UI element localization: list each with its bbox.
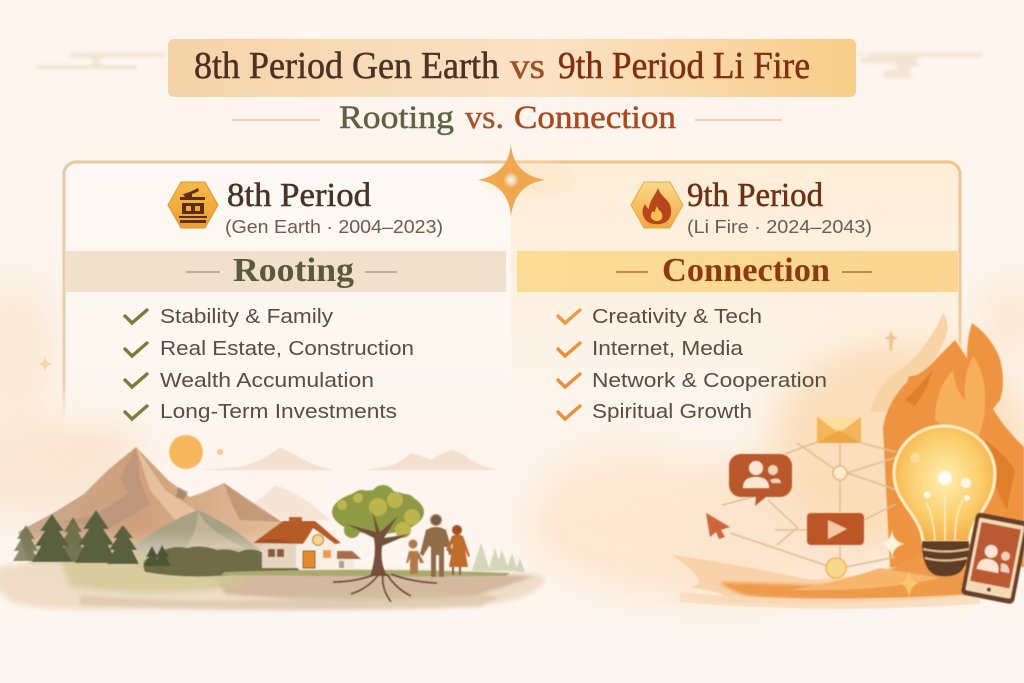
icon: earth pagoda hexagon bbox=[168, 182, 218, 228]
sparkles bbox=[879, 530, 919, 599]
panel: 9th period bbox=[511, 162, 960, 430]
ground wash bbox=[0, 553, 545, 610]
heading: 9th period bbox=[687, 177, 872, 237]
heading: 9th period: 9th Period bbox=[687, 177, 823, 214]
icon: envelope bbox=[817, 417, 861, 443]
center divider bbox=[510, 215, 512, 530]
title banner bbox=[168, 39, 856, 97]
pale back flame bbox=[870, 313, 948, 412]
list: 9th period bbox=[558, 306, 827, 423]
heading: 8th period bbox=[225, 177, 443, 237]
list: 8th period bbox=[125, 306, 414, 423]
title text: vs bbox=[510, 46, 545, 86]
main flame bbox=[883, 323, 1024, 567]
ground fire bbox=[672, 552, 980, 609]
distant mountains bbox=[200, 447, 498, 520]
subtitle: Connection bbox=[514, 100, 676, 136]
subtitle bbox=[232, 100, 782, 136]
band: connection bbox=[517, 251, 958, 292]
subtitle: Rooting bbox=[339, 100, 454, 136]
grass strip bbox=[221, 570, 510, 576]
icon: chat bubble with people bbox=[729, 454, 792, 506]
title text: 9th Period Li Fire bbox=[558, 45, 810, 87]
icon: center star bbox=[478, 143, 575, 216]
icon: smartphone bbox=[960, 512, 1024, 605]
list item: spiritual: Spiritual Growth bbox=[592, 401, 752, 423]
subtitle: vs. bbox=[465, 100, 504, 136]
tree with roots bbox=[332, 485, 437, 602]
faint right pines bbox=[472, 543, 525, 572]
small star bbox=[884, 330, 898, 351]
main mountains bbox=[18, 447, 290, 575]
bushes bbox=[143, 546, 301, 577]
small left sparkle bbox=[38, 357, 52, 371]
house bbox=[253, 517, 361, 568]
decorative clouds beside title bbox=[35, 53, 982, 78]
illustration: mountain landscape bbox=[0, 435, 545, 610]
panel: 8th period bbox=[64, 162, 511, 440]
heading: 9th period: (Li Fire · 2024–2043) bbox=[687, 216, 872, 237]
pine trees bbox=[13, 510, 171, 566]
list item: network: Network & Cooperation bbox=[592, 370, 827, 392]
family silhouettes bbox=[406, 514, 470, 577]
list item: real estate: Real Estate, Construction bbox=[160, 338, 414, 360]
illustration: fire, bulb and network bbox=[672, 313, 1024, 609]
icon: cursor arrow bbox=[706, 513, 730, 539]
watercolor wash: left side bbox=[0, 280, 140, 520]
icon: light bulb bbox=[894, 426, 995, 576]
sun bbox=[169, 435, 203, 469]
heading: 8th period: (Gen Earth · 2004–2023) bbox=[225, 216, 443, 237]
icon: video play bbox=[807, 513, 864, 545]
list item: internet: Internet, Media bbox=[592, 338, 744, 360]
list item: investments: Long-Term Investments bbox=[160, 401, 397, 423]
band: connection: Connection bbox=[662, 252, 830, 289]
title text: 8th Period Gen Earth bbox=[194, 45, 499, 87]
watercolor wash: right side bbox=[530, 280, 1024, 600]
band: rooting bbox=[65, 251, 506, 292]
list item: wealth: Wealth Accumulation bbox=[160, 370, 374, 392]
heading: 8th period: 8th Period bbox=[227, 177, 371, 214]
band: rooting: Rooting bbox=[233, 252, 354, 289]
icon: flame hexagon bbox=[631, 182, 683, 228]
list item: stability: Stability & Family bbox=[160, 306, 333, 328]
network nodes bbox=[826, 466, 847, 578]
network lines bbox=[722, 442, 897, 568]
list item: creativity: Creativity & Tech bbox=[592, 306, 762, 328]
